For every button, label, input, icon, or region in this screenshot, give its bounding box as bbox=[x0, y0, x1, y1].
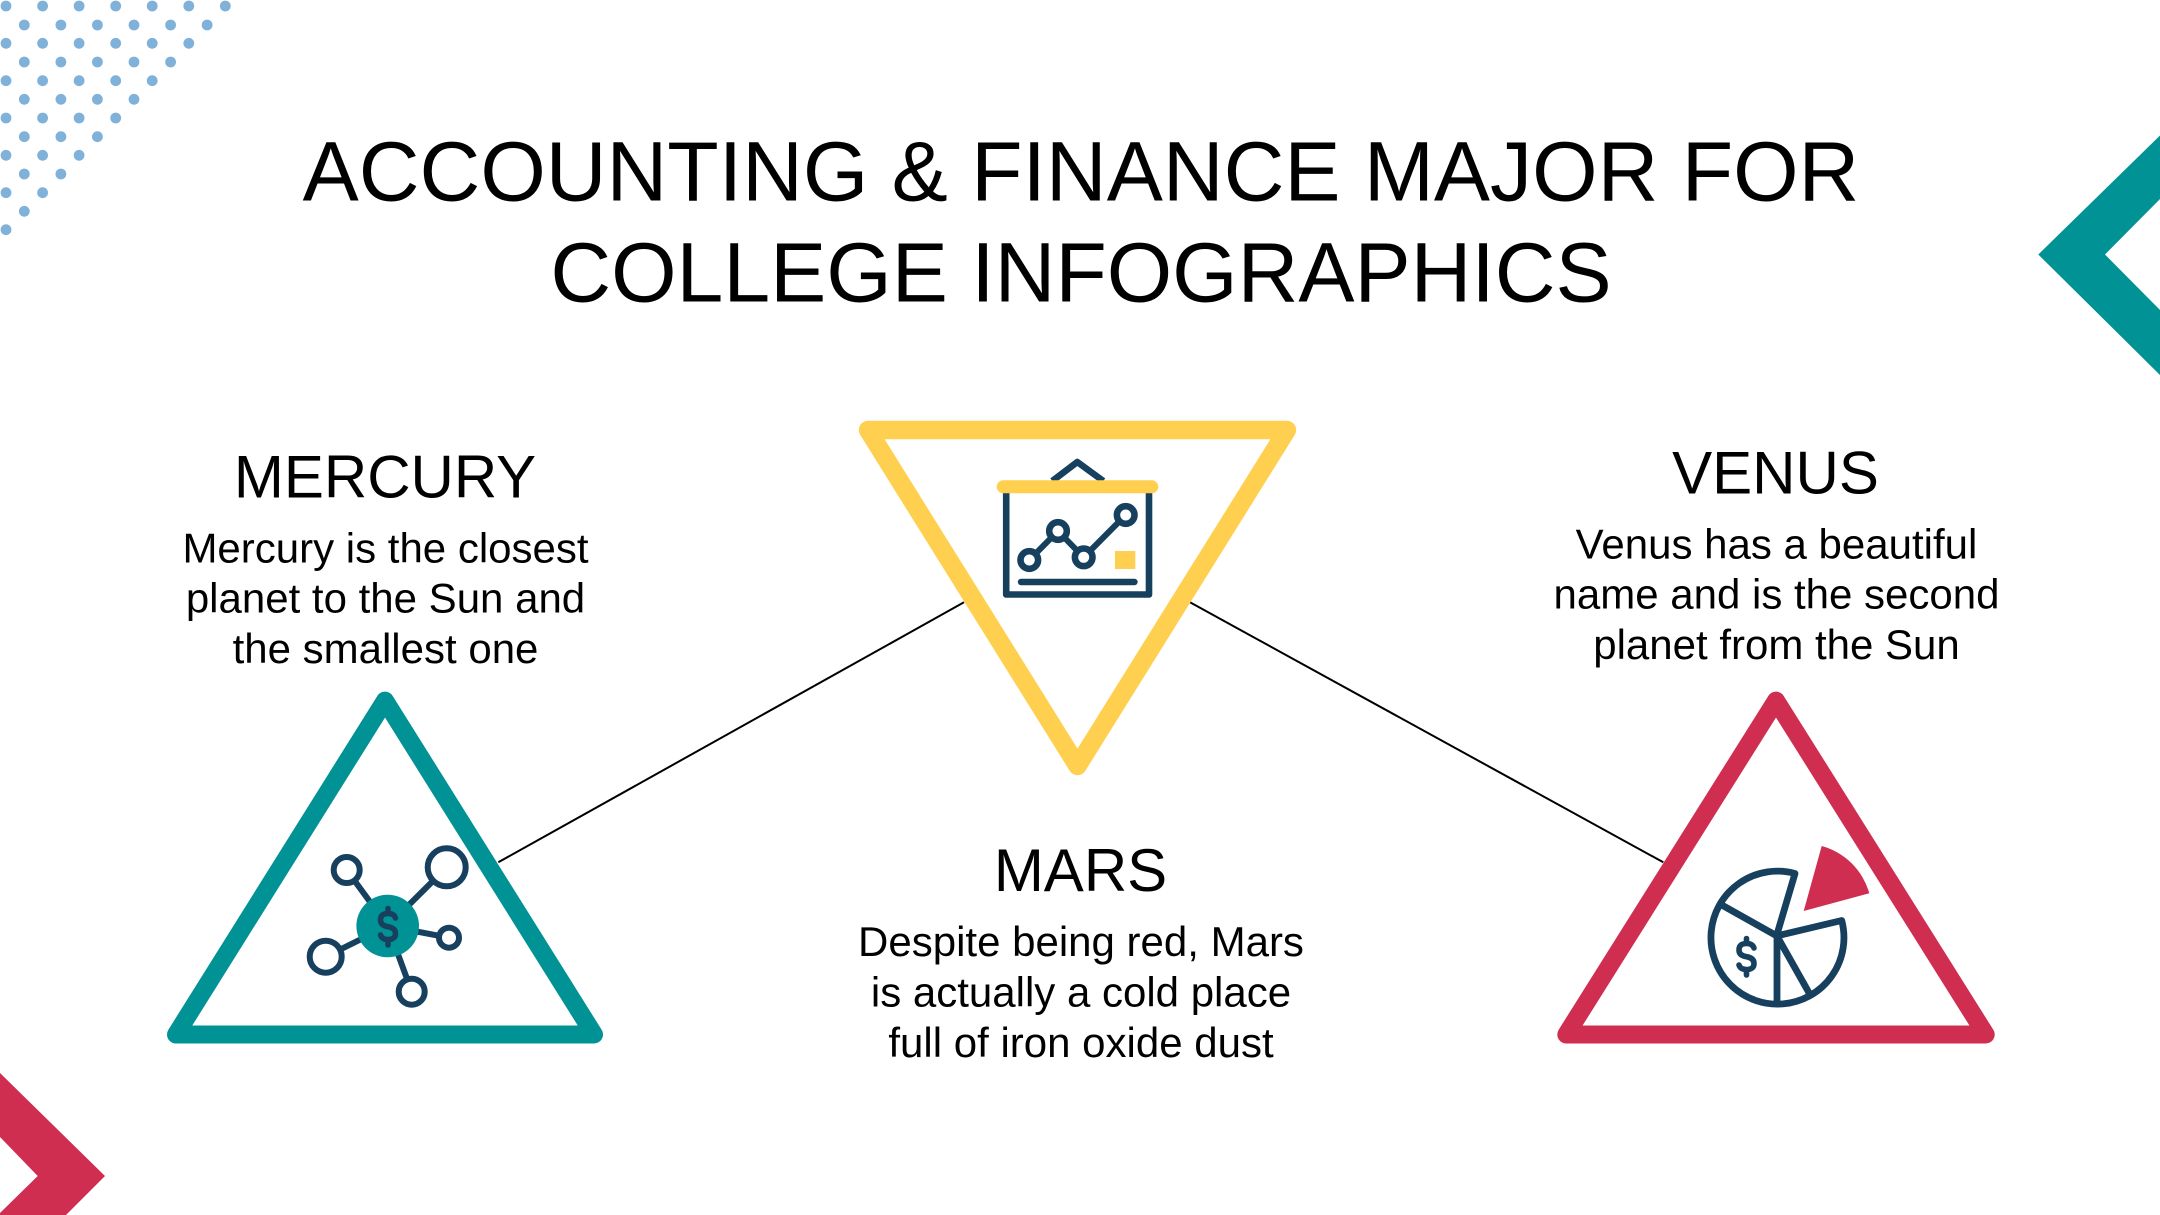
connector line: Mars to Venus bbox=[1190, 602, 1663, 862]
panel: Mercury bbox=[176, 444, 594, 1034]
title: ACCOUNTING & FINANCE MAJOR FOR bbox=[303, 125, 1859, 219]
heading: Mars: MARS bbox=[994, 837, 1167, 904]
red triangle bbox=[1566, 701, 1986, 1034]
red chevron bottom-left bbox=[0, 1073, 105, 1215]
heading: Mercury: MERCURY bbox=[234, 444, 536, 510]
icon: pie chart with dollar bbox=[1711, 846, 1869, 1005]
text: Mars description bbox=[858, 918, 1304, 1066]
panel: Venus bbox=[1554, 439, 1999, 1034]
decorative dot pattern top-left bbox=[1, 1, 231, 235]
text: Mars description: is actually a cold place bbox=[871, 968, 1291, 1015]
text: Mercury description bbox=[182, 524, 589, 672]
title bbox=[303, 125, 1859, 320]
text: Mars description: full of iron oxide dust bbox=[888, 1019, 1274, 1066]
text: Venus description: name and is the second bbox=[1554, 571, 1999, 618]
title: COLLEGE INFOGRAPHICS bbox=[550, 226, 1612, 320]
text: Mercury description: Mercury is the closest bbox=[182, 524, 589, 571]
teal chevron top-right bbox=[2038, 136, 2160, 375]
icon: network with dollar bbox=[310, 848, 466, 1005]
text: Venus description: planet from the Sun bbox=[1593, 621, 1960, 668]
text: Venus description: Venus has a beautiful bbox=[1576, 520, 1977, 567]
connector line: Mercury to Mars bbox=[498, 602, 964, 862]
panel: Mars bbox=[858, 430, 1304, 1066]
text: Mercury description: the smallest one bbox=[233, 625, 538, 672]
text: Mercury description: planet to the Sun and bbox=[186, 575, 585, 622]
text: Venus description bbox=[1554, 520, 1999, 668]
icon: presentation board with line chart bbox=[997, 462, 1158, 594]
teal triangle bbox=[176, 701, 594, 1034]
heading: Venus: VENUS bbox=[1672, 439, 1879, 506]
yellow inverted triangle bbox=[868, 430, 1287, 766]
text: Mars description: Despite being red, Mars bbox=[858, 918, 1304, 965]
